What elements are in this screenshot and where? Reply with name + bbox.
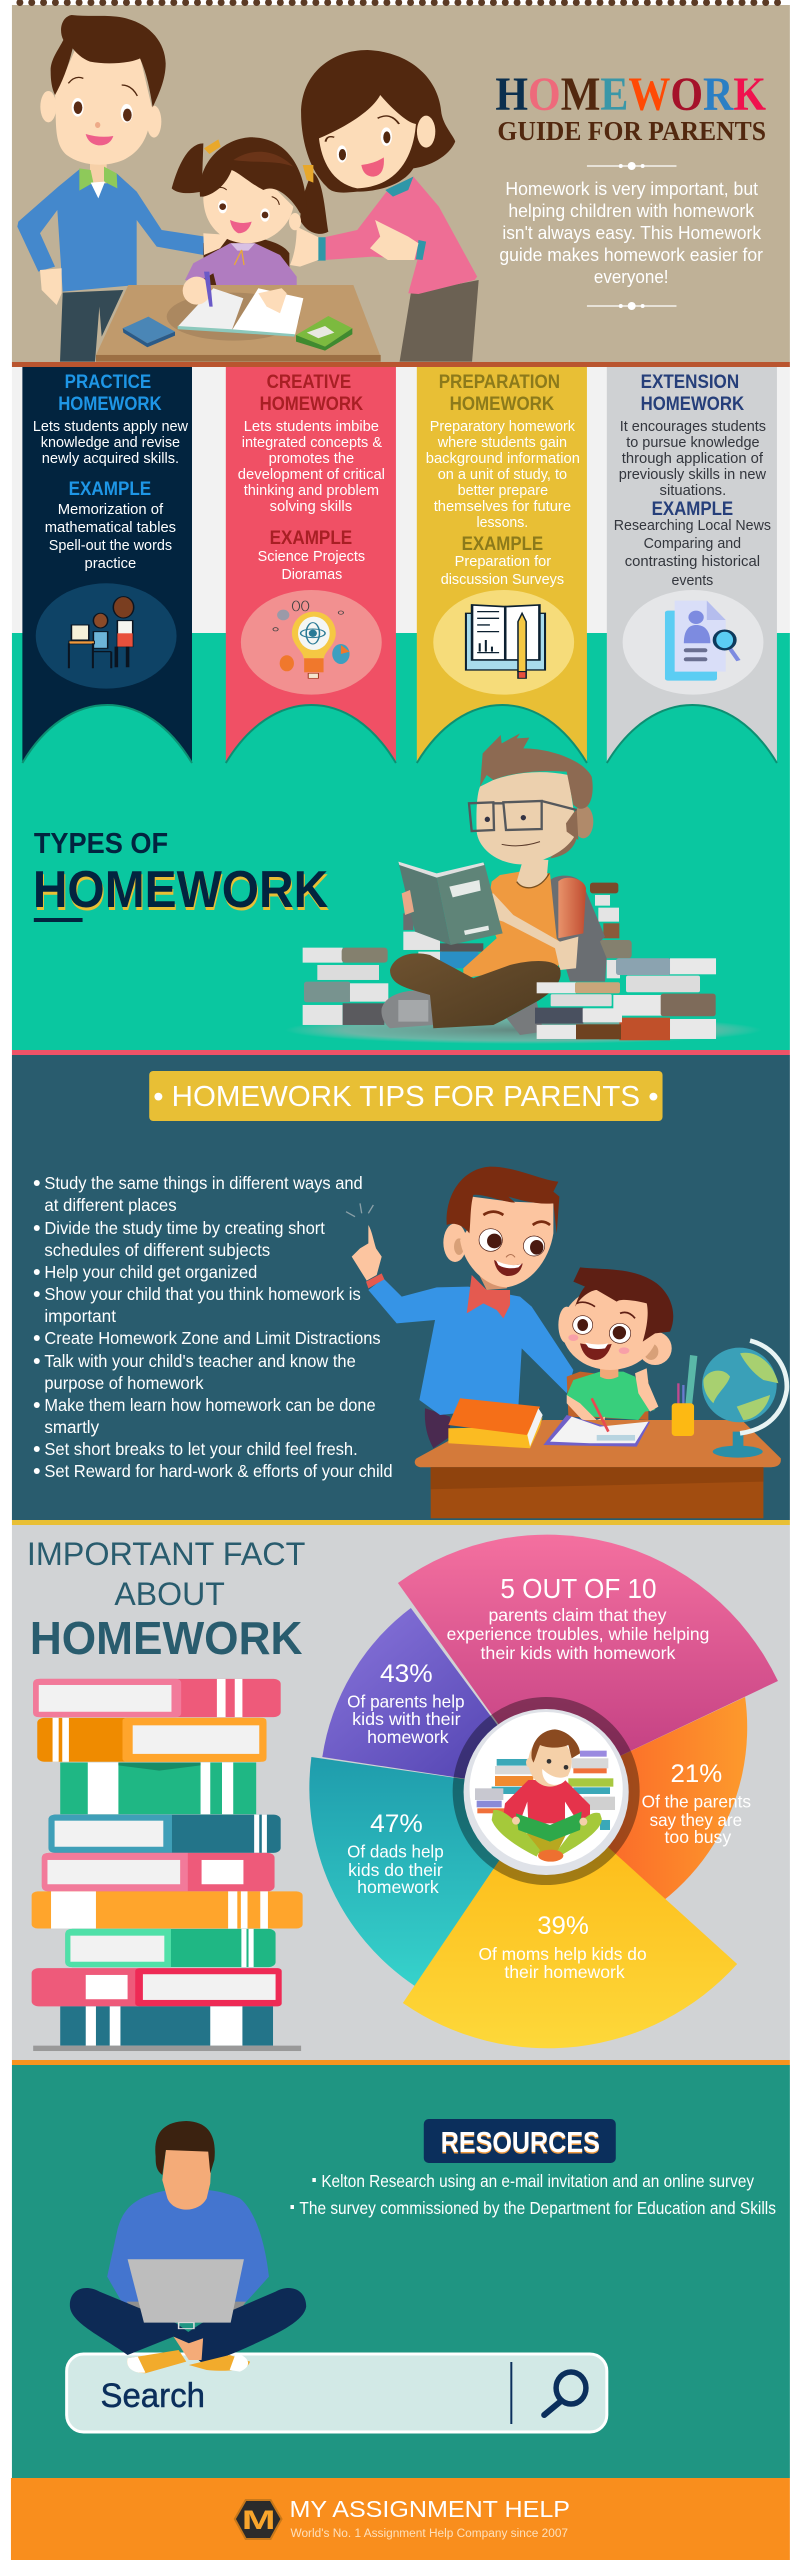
banner: extension homework: contrasting historical xyxy=(625,553,760,570)
banner: practice homework: HOMEWORK xyxy=(58,393,162,415)
heading: important fact about homework: IMPORTANT FACT xyxy=(27,1536,305,1572)
banner: creative homework: EXAMPLE xyxy=(270,527,352,549)
banner: extension homework xyxy=(607,367,777,763)
title xyxy=(495,68,766,146)
chart: radial pie xyxy=(309,1535,778,2048)
segment: 43%: Of parents help xyxy=(347,1691,465,1712)
banner: creative homework: Dioramas xyxy=(282,566,342,583)
segment: 39%: their homework xyxy=(504,1962,625,1982)
banner: extension homework: Researching Local News xyxy=(614,517,771,534)
segment: 21%: 21% xyxy=(670,1760,722,1788)
title: GUIDE FOR PARENTS xyxy=(497,116,766,146)
panel: homework tips for parents xyxy=(12,1055,790,1525)
banner: practice homework: Spell-out the words xyxy=(49,537,172,554)
tips list: Set Reward for hard-work & efforts of your child xyxy=(44,1461,393,1481)
banner: extension homework: events xyxy=(671,572,713,589)
segment: 47%: homework xyxy=(357,1877,439,1897)
icon: document search xyxy=(623,590,763,695)
banner: preparation homework: PREPARATION xyxy=(439,371,560,393)
segment: 39%: Of moms help kids do xyxy=(478,1944,647,1964)
tips list: Study the same things in different ways and xyxy=(44,1173,363,1193)
banner: preparation homework: Preparation for xyxy=(455,553,551,570)
banner: preparation homework: themselves for future xyxy=(434,498,571,515)
title: HOMEWORK xyxy=(495,68,766,121)
panel: important facts xyxy=(12,1525,790,2065)
tips list: Show your child that you think homework is xyxy=(44,1284,361,1304)
illustration: book stack xyxy=(32,1679,303,2051)
icon: magnifier xyxy=(544,2372,586,2415)
banner: practice homework: EXAMPLE xyxy=(69,478,151,500)
banner: extension homework: It encourages students xyxy=(620,418,766,435)
heading: important fact about homework: HOMEWORK xyxy=(30,1612,302,1664)
tips list xyxy=(34,1173,393,1481)
segment: 47%: kids do their xyxy=(348,1860,443,1880)
heading: types of homework: HOMEWORK xyxy=(33,860,328,918)
illustration: father, daughter and desk xyxy=(17,15,381,362)
footer xyxy=(11,2478,790,2560)
segment: 47%: Of dads help xyxy=(347,1841,444,1862)
tips list: Set short breaks to let your child feel fresh. xyxy=(44,1439,358,1459)
intro text xyxy=(499,162,763,310)
segment: 5 out of 10 xyxy=(398,1535,778,1791)
heading: types of homework: TYPES OF xyxy=(34,828,168,860)
heading: tips banner xyxy=(149,1071,663,1121)
resources heading: RESOURCES xyxy=(441,2127,600,2159)
banner: preparation homework: EXAMPLE xyxy=(462,533,543,555)
intro text: Homework is very important, but xyxy=(505,178,758,199)
banner: extension homework: through application of xyxy=(622,450,764,467)
icon: open book with pencil xyxy=(433,590,574,695)
segment: 47% xyxy=(309,1757,546,1986)
banner: creative homework: thinking and problem xyxy=(244,482,379,499)
heading: important fact about homework: ABOUT xyxy=(114,1576,225,1612)
segment: 43%: homework xyxy=(367,1727,449,1747)
banner: extension homework: previously skills in new xyxy=(619,466,766,483)
resources list: Kelton Research using an e-mail invitation and an online survey xyxy=(321,2171,754,2191)
banner: practice homework: Lets students apply new xyxy=(33,418,188,435)
banner: preparation homework xyxy=(417,367,587,763)
segment: 39%: 39% xyxy=(537,1912,589,1940)
segment: 5 out of 10: their kids with homework xyxy=(480,1643,675,1663)
tips list: Create Homework Zone and Limit Distractions xyxy=(44,1328,381,1348)
heading: important fact about homework xyxy=(27,1536,305,1664)
search bar xyxy=(67,2354,607,2432)
banner: practice homework: mathematical tables xyxy=(45,519,176,536)
banner: practice homework: knowledge and revise xyxy=(41,434,180,451)
tips list: Help your child get organized xyxy=(44,1262,257,1282)
banner: extension homework: to pursue knowledge xyxy=(626,434,760,451)
banner: preparation homework: lessons. xyxy=(477,514,528,531)
intro text: everyone! xyxy=(594,266,669,287)
banner: practice homework: practice xyxy=(85,555,136,572)
banner: extension homework: Comparing and xyxy=(644,535,741,552)
brand name: MY ASSIGNMENT HELP xyxy=(289,2496,570,2522)
resources heading: RESOURCES xyxy=(441,2128,600,2161)
illustration: person with laptop xyxy=(70,2121,306,2373)
banner: creative homework: Lets students imbibe xyxy=(244,418,379,435)
intro text: helping children with homework xyxy=(508,200,755,221)
banner: creative homework: solving skills xyxy=(270,498,352,515)
heading: tips banner: • HOMEWORK TIPS FOR PARENTS • xyxy=(153,1081,659,1113)
segment: 21% xyxy=(546,1697,751,1937)
tips list: Make them learn how homework can be done xyxy=(44,1395,376,1415)
banner: creative homework: promotes the xyxy=(269,450,354,467)
illustration: boy reading with books xyxy=(285,733,762,1044)
banner: preparation homework: on a unit of study, to xyxy=(438,466,567,483)
intro text: guide makes homework easier for xyxy=(499,244,763,265)
segment: 21%: too busy xyxy=(665,1827,731,1847)
banner: preparation homework: better prepare xyxy=(458,482,548,499)
segment: 5 out of 10: parents claim that they xyxy=(488,1605,667,1625)
banner: preparation homework: HOMEWORK xyxy=(450,393,554,415)
icon: students at desk xyxy=(36,583,177,689)
segment: 39% xyxy=(403,1791,737,2048)
segment: 5 out of 10: experience troubles, while helping xyxy=(447,1624,709,1644)
panel: resources xyxy=(12,2065,790,2478)
banner: creative homework: development of critical xyxy=(238,466,385,483)
banner: practice homework: Memorization of xyxy=(58,501,164,518)
brand name: World's No. 1 Assignment Help Company since 2007 xyxy=(290,2526,568,2540)
tips list: important xyxy=(44,1306,116,1326)
banner: extension homework: EXTENSION xyxy=(641,371,739,393)
banner: extension homework: HOMEWORK xyxy=(641,393,744,415)
banner: practice homework xyxy=(22,367,192,763)
banner: extension homework: situations. xyxy=(660,482,726,499)
resources heading xyxy=(424,2119,616,2163)
banner: practice homework: PRACTICE xyxy=(65,371,151,393)
banner: creative homework: Science Projects xyxy=(258,548,365,565)
segment: 21%: say they are xyxy=(650,1810,742,1830)
illustration: mother xyxy=(301,50,479,362)
banner: creative homework: CREATIVE xyxy=(267,371,351,393)
tips list: Divide the study time by creating short xyxy=(44,1218,325,1238)
segment: 43%: 43% xyxy=(380,1660,433,1688)
banner: practice homework: newly acquired skills. xyxy=(42,450,179,467)
banner: preparation homework: background information xyxy=(426,450,580,467)
segment: 47%: 47% xyxy=(370,1810,423,1838)
banner: extension homework: EXAMPLE xyxy=(652,498,733,520)
tips list: smartly xyxy=(44,1417,99,1437)
illustration: father and son at desk xyxy=(346,1167,787,1518)
segment: 5 out of 10: 5 OUT OF 10 xyxy=(500,1573,657,1604)
banner: creative homework xyxy=(226,367,396,763)
tips list: schedules of different subjects xyxy=(44,1240,270,1260)
search bar: Search xyxy=(100,2377,205,2415)
illustration: child reading in centre xyxy=(475,1729,615,1862)
banner: preparation homework: Preparatory homework xyxy=(430,418,575,435)
segment: 43% xyxy=(322,1608,546,1791)
segment: 43%: kids with their xyxy=(352,1709,461,1729)
banner: preparation homework: where students gain xyxy=(437,434,567,451)
heading: types of homework: HOMEWORK xyxy=(34,863,329,921)
tips list: at different places xyxy=(44,1195,177,1215)
icon: idea lightbulb xyxy=(241,590,382,695)
logo: M xyxy=(242,2505,276,2535)
tips list: Talk with your child's teacher and know the xyxy=(44,1351,356,1371)
logo xyxy=(235,2500,282,2539)
brand name xyxy=(289,2496,570,2540)
banner: creative homework: integrated concepts & xyxy=(242,434,382,451)
intro text: isn't always easy. This Homework xyxy=(502,222,762,243)
panel: types of homework xyxy=(12,367,790,1055)
banner: preparation homework: discussion Surveys xyxy=(441,571,564,588)
panel: hero xyxy=(12,2,790,367)
resources list xyxy=(290,2171,776,2218)
banner: creative homework: HOMEWORK xyxy=(260,393,363,415)
heading: types of homework xyxy=(33,828,329,922)
segment: 21%: Of the parents xyxy=(642,1791,751,1812)
tips list: purpose of homework xyxy=(44,1373,204,1393)
